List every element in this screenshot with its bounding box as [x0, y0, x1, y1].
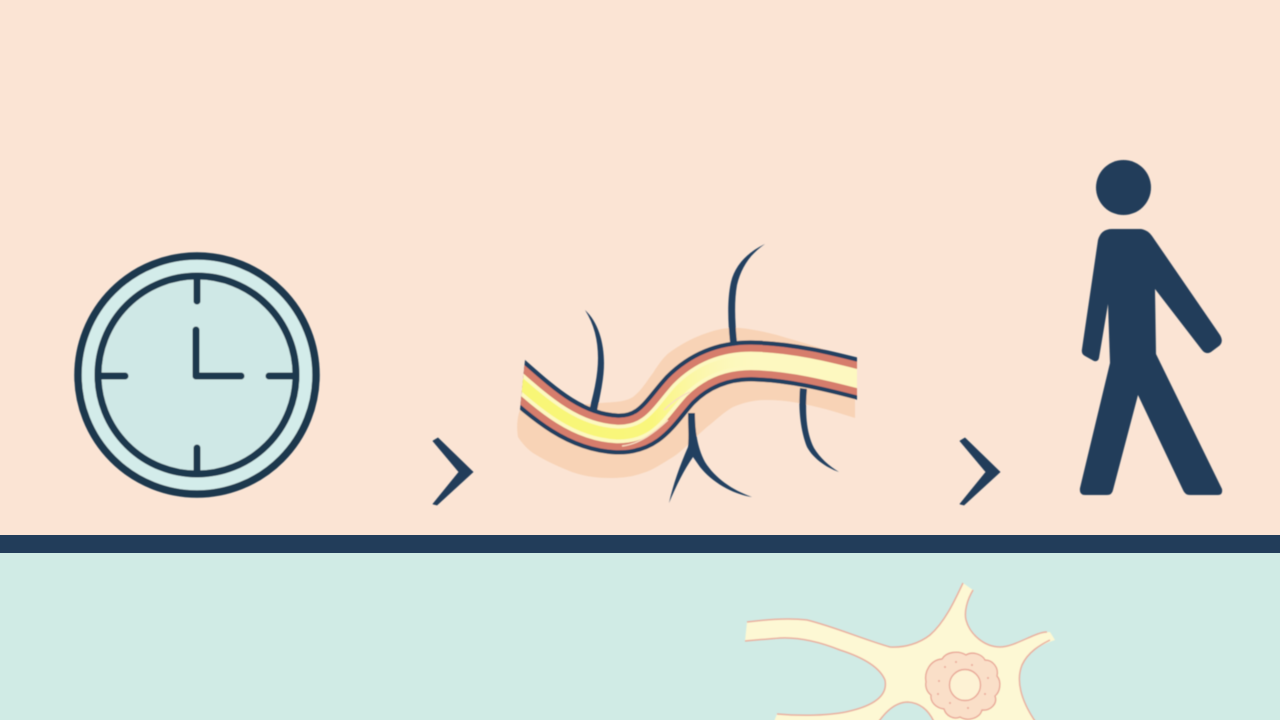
- halo around nerve: [517, 328, 855, 478]
- nerve branches: [585, 244, 839, 503]
- panel: upper peach background: [0, 0, 1280, 536]
- icon: clock: [78, 256, 316, 494]
- icon: walking person: [1080, 160, 1222, 495]
- neuron membrane outline: [745, 583, 1050, 720]
- arrow: first chevron: [433, 438, 473, 505]
- infographic scene: [0, 159, 1280, 720]
- nerve band with walls, sheath and core: [510, 361, 870, 446]
- panel: lower mint background: [0, 553, 1280, 720]
- sheath streaks: [622, 392, 690, 446]
- neuron body: [745, 583, 1055, 720]
- divider bar: [0, 535, 1280, 553]
- icon: nerve fibre: [510, 244, 870, 503]
- arrow: second chevron: [960, 438, 1000, 505]
- neuron nucleus cluster: [926, 652, 1000, 719]
- illustration: neuron cell: [745, 583, 1055, 720]
- person body: [1080, 229, 1222, 495]
- person head: [1096, 160, 1151, 215]
- neuron nucleolus: [950, 670, 980, 700]
- nucleus specks: [937, 661, 989, 709]
